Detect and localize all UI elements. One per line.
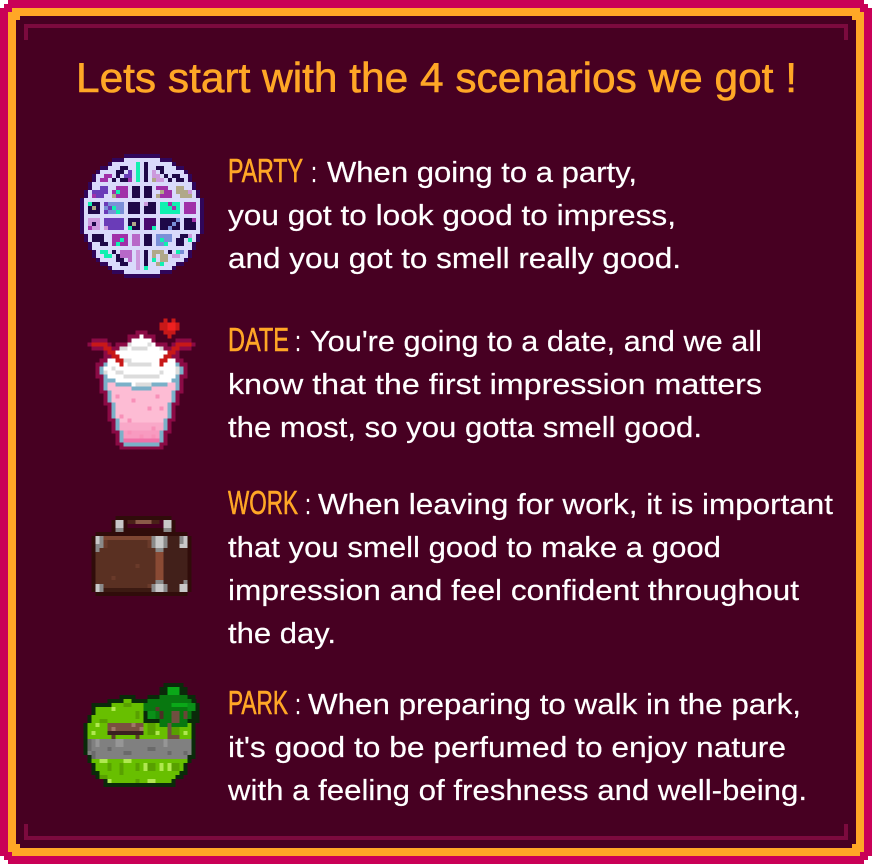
text block: party: you got to look good to impress, bbox=[228, 200, 676, 232]
text block: date: DATE bbox=[228, 321, 289, 358]
text block: park: When preparing to walk in the park, bbox=[308, 689, 801, 721]
text block: work: When leaving for work, it is important bbox=[318, 489, 833, 521]
text block: park: with a feeling of freshness and well-being. bbox=[227, 775, 807, 807]
text block: party: PARTY bbox=[228, 152, 303, 189]
text block: party: When going to a party, bbox=[327, 157, 637, 189]
text block: work bbox=[228, 484, 833, 650]
text block: date bbox=[228, 321, 762, 444]
text block: party bbox=[228, 152, 681, 275]
icon: park island bbox=[83, 683, 199, 787]
text block: party: and you got to smell really good. bbox=[228, 243, 681, 275]
text block: park: PARK bbox=[228, 684, 288, 721]
text block: party: : bbox=[311, 157, 317, 189]
icon: disco ball bbox=[80, 154, 204, 278]
text block: work: WORK bbox=[228, 484, 298, 521]
text block: work: : bbox=[305, 489, 311, 521]
text block: date: You're going to a date, and we all bbox=[310, 326, 762, 358]
text block: park: : bbox=[295, 689, 301, 721]
text block: date: the most, so you gotta smell good. bbox=[228, 412, 702, 444]
title: Lets start with the 4 scenarios we got ! bbox=[76, 54, 797, 101]
text block: date: : bbox=[295, 326, 301, 358]
text block: work: the day. bbox=[228, 618, 336, 650]
icon: briefcase bbox=[91, 516, 191, 596]
text block: park: it's good to be perfumed to enjoy nature bbox=[228, 732, 786, 764]
text block: date: know that the first impression matters bbox=[228, 369, 762, 401]
text block: work: that you smell good to make a good bbox=[228, 532, 721, 564]
text block: work: impression and feel confident throughout bbox=[228, 575, 799, 607]
icon: milkshake with heart bbox=[87, 318, 195, 450]
text block: park bbox=[227, 684, 807, 807]
